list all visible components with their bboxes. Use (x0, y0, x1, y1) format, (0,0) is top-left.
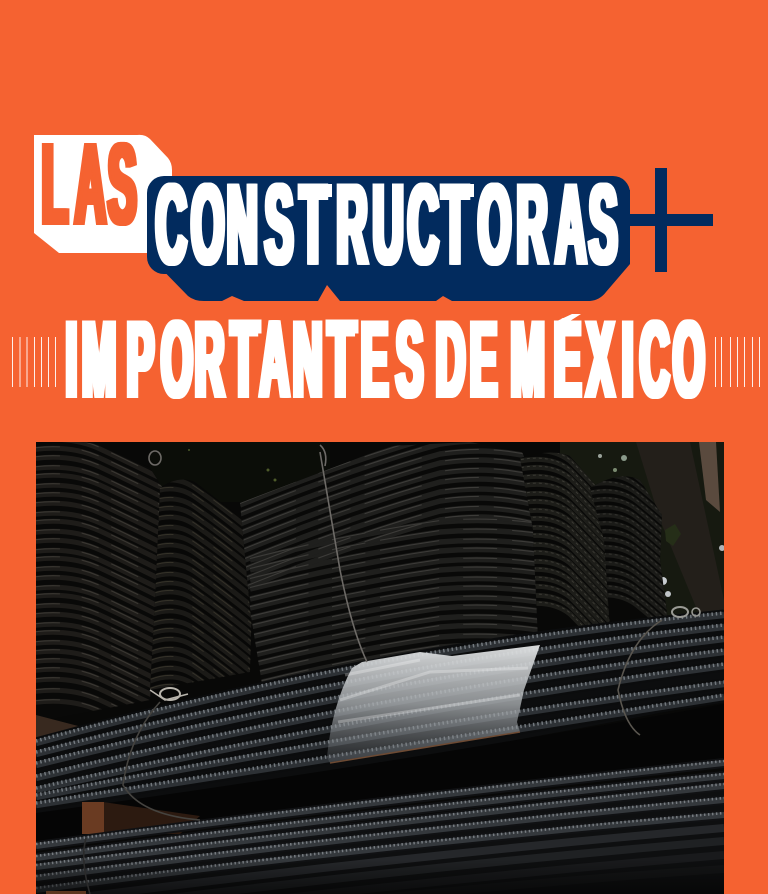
binding wires and knots (84, 445, 700, 894)
wood block (82, 802, 200, 834)
trees behind rebar (188, 442, 724, 616)
title word: LAS (34, 123, 172, 253)
LAS white tag (34, 135, 172, 253)
plastic wrap (327, 645, 540, 763)
rebar stack 2 (150, 480, 252, 690)
rebar stack 1 (36, 442, 162, 711)
navy extrusion (148, 190, 630, 301)
rebar stack 4 (520, 452, 610, 632)
title word: CONSTRUCTORAS (147, 161, 713, 301)
wood foot (46, 891, 86, 894)
subtitle: IMPORTANTES DE MÉXICO: IMPORTANTES DE MÉXICO (66, 299, 705, 420)
left stripes ornament (12, 337, 56, 387)
upper rebar bundle (36, 610, 724, 815)
lower rebar bundle (36, 761, 724, 894)
bottom fade (36, 864, 724, 894)
LAS lettering: LAS (42, 123, 137, 248)
rebar stack 3 (240, 442, 538, 682)
shadow below upper bundle (36, 748, 471, 814)
right stripes ornament (715, 337, 760, 387)
photo: stacked steel rebar (30, 422, 725, 894)
navy plus sign (620, 168, 713, 272)
CONSTRUCTORAS lettering: CONSTRUCTORAS (156, 161, 617, 287)
subtitle: IMPORTANTES DE MÉXICO (66, 318, 706, 399)
accent on É (557, 314, 581, 321)
navy outline (147, 176, 630, 274)
wood beam upper left (36, 715, 78, 738)
rebar stack 5 (590, 476, 667, 622)
